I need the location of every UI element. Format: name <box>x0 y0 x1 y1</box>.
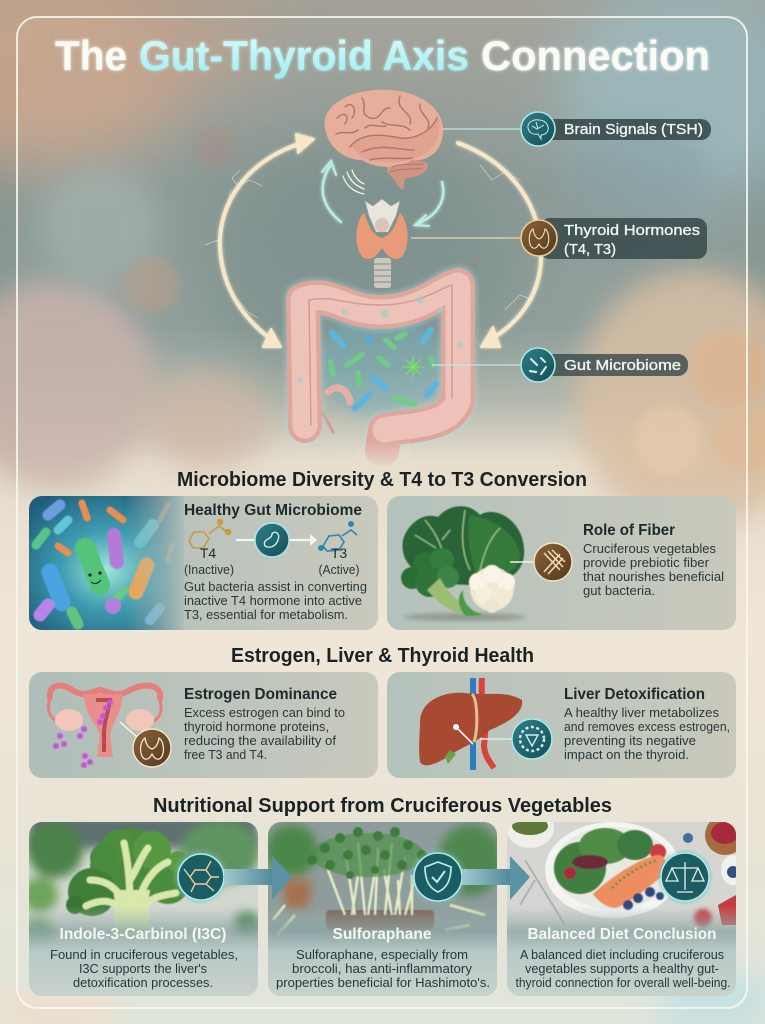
diagram: T4 to T3 conversion <box>184 520 360 577</box>
panel: role of fiber: gut bacteria. <box>583 583 655 598</box>
illustration: vegetables <box>401 506 527 621</box>
panel: indole-3-carbinol <box>22 815 260 996</box>
text: estrogen dominance: Estrogen Dominance <box>184 686 337 703</box>
text: healthy gut body <box>184 579 367 622</box>
title: Gut-Thyroid Axis <box>139 32 469 79</box>
panel: indole-3-carbinol: Found in cruciferous vegetables, <box>50 947 238 962</box>
text: healthy gut heading: Healthy Gut Microbiome <box>184 502 362 519</box>
panel: estrogen dominance: thyroid hormone proteins, <box>184 719 329 734</box>
panel: liver detoxification: impact on the thyroid. <box>564 747 689 762</box>
label: gut microbiome: Gut Microbiome <box>564 357 681 374</box>
lightning wisps <box>205 165 533 318</box>
photo: broccoli <box>22 815 260 996</box>
panel: healthy gut microbiome <box>29 496 378 630</box>
heading: nutritional support: Nutritional Support from Cruciferous Vegetables <box>153 795 612 817</box>
icon: gear filter <box>480 719 552 759</box>
panel: estrogen dominance <box>29 672 378 778</box>
panel: role of fiber: that nourishes beneficial <box>583 569 724 584</box>
panel: balanced diet: thyroid connection for overall well-being. <box>516 975 730 990</box>
diagram: T4 to T3 conversion: (Active) <box>318 563 360 577</box>
panel: sulforaphane: Sulforaphane, especially from <box>296 947 468 962</box>
heading: microbiome diversity: Microbiome Diversity & T4 to T3 Conversion <box>177 469 587 491</box>
text: i3c: Indole-3-Carbinol (I3C) <box>60 926 226 943</box>
label: brain signals: Brain Signals (TSH) <box>564 121 703 138</box>
icon: molecule <box>178 854 224 900</box>
panel: liver detoxification <box>387 672 736 778</box>
panel: estrogen dominance: reducing the availability of <box>184 733 336 748</box>
panel: liver detoxification: and removes excess estrogen, <box>564 719 730 734</box>
label: thyroid hormones: (T4, T3) <box>564 241 616 258</box>
brain signal waves <box>343 170 364 194</box>
label: thyroid hormones: Thyroid Hormones <box>564 222 700 239</box>
arrow: sulforaphane to balanced diet <box>462 856 530 900</box>
text: healthy gut body: Gut bacteria assist in converting <box>184 579 367 594</box>
diagram: T4 to T3 conversion: (Inactive) <box>184 563 234 577</box>
panel: role of fiber: provide prebiotic fiber <box>583 555 710 570</box>
arrow: i3c to sulforaphane <box>224 856 292 900</box>
icon: microbes <box>530 358 546 374</box>
text: balanced diet: Balanced Diet Conclusion <box>528 926 716 943</box>
illustration: uterus <box>48 686 161 768</box>
gut bacteria <box>331 330 436 408</box>
panel: sulforaphane: broccoli, has anti-inflammatory <box>292 961 472 976</box>
icon: thyroid <box>120 722 171 767</box>
photo: salad and salmon <box>507 822 736 996</box>
panel: role of fiber <box>387 496 736 630</box>
text: role of fiber: Role of Fiber <box>583 522 675 539</box>
colon tube <box>303 285 458 450</box>
icon: shield <box>414 853 462 901</box>
panel: indole-3-carbinol: I3C supports the liver's <box>79 961 207 976</box>
label: brain signals <box>443 112 711 146</box>
title: Connection <box>481 32 710 79</box>
text: healthy gut body: inactive T4 hormone into active <box>184 593 362 608</box>
cyan feedback arrows <box>322 161 443 226</box>
label: gut microbiome <box>432 348 688 382</box>
diagram: T4 to T3 conversion: T4 <box>200 545 216 561</box>
title: The <box>55 32 127 79</box>
text: sulforaphane: Sulforaphane <box>332 926 432 943</box>
icon: brain outline <box>528 120 548 139</box>
icon: brain <box>325 90 443 190</box>
icon: thyroid and trachea <box>356 199 408 288</box>
panel: sulforaphane <box>224 822 502 996</box>
title <box>55 32 710 79</box>
panel: indole-3-carbinol: detoxification processes. <box>73 975 213 990</box>
text: liver detoxification: Liver Detoxification <box>564 686 705 703</box>
heading: estrogen: Estrogen, Liver & Thyroid Health <box>231 645 534 667</box>
icon: scales <box>661 853 709 901</box>
text: healthy gut body: T3, essential for metabolism. <box>184 607 348 622</box>
illustration: liver <box>419 678 522 770</box>
panel: liver detoxification: preventing its negative <box>564 733 696 748</box>
panel: balanced diet: A balanced diet including cruciferous <box>520 947 724 962</box>
panel: balanced diet: vegetables supports a healthy gut- <box>525 961 719 976</box>
right arc arrow: brain to gut <box>458 143 541 347</box>
icon: gut <box>297 285 463 470</box>
feedback arcs <box>205 134 541 347</box>
panel: sulforaphane: properties beneficial for Hashimoto's. <box>276 975 490 990</box>
left arc arrow: gut to brain and back <box>220 134 314 347</box>
icon: thyroid outline <box>529 229 549 248</box>
photo: sprouts <box>266 822 502 996</box>
diagram: T4 to T3 conversion: T3 <box>331 545 347 561</box>
icon: fiber <box>510 543 572 581</box>
illustration: bacteria <box>29 496 184 630</box>
label: thyroid hormones <box>411 218 707 259</box>
panel: role of fiber: Cruciferous vegetables <box>583 541 716 556</box>
panel: balanced diet <box>462 822 736 996</box>
panel: estrogen dominance: Excess estrogen can bind to <box>184 705 345 720</box>
panel: liver detoxification: A healthy liver metabolizes <box>564 705 719 720</box>
panel: estrogen dominance: free T3 and T4. <box>184 747 267 762</box>
